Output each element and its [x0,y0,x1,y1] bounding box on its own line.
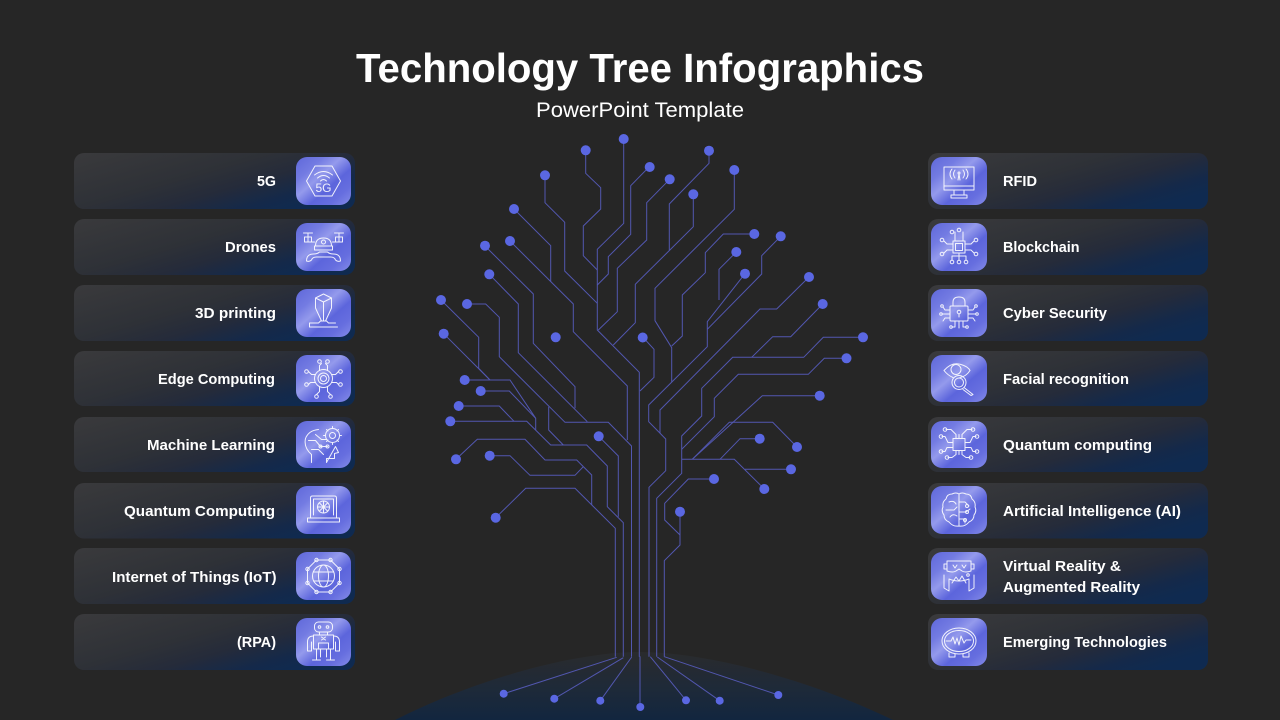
left item: 5G [74,153,355,209]
label: 3D printing [195,305,276,322]
label: Emerging Technologies [1003,634,1167,651]
left item: RPA [74,614,355,670]
icon: brain [942,493,976,526]
label: Blockchain [1003,239,1080,256]
ground mound [395,652,893,720]
right item: RFID [928,153,1208,209]
label: Drones [225,239,276,256]
right item: Cyber Security [928,285,1208,341]
icon: 5G hexagon: 5G [315,181,332,195]
label: Quantum computing [1003,437,1152,454]
label: RFID [1003,173,1037,190]
subtitle: PowerPoint Template [536,99,744,122]
icon: IoT globe [306,558,341,594]
label: Edge Computing [158,371,275,388]
left item: Drones [74,219,355,275]
icon: head with gear [305,426,342,462]
icon: laptop [308,496,340,522]
icon: robot [308,622,340,660]
labels: Virtual Reality & [1003,558,1121,575]
icon: pulse monitor [942,628,976,657]
labels: Augmented Reality [1003,579,1141,596]
left item: 3D printing [74,285,355,341]
tree branches and trunk [441,139,863,707]
left item: Machine Learning [74,417,355,472]
left item: Edge Computing [74,351,355,406]
icon: 3D printer crystal [310,294,338,327]
icon: quantum chip [939,428,979,459]
icon: edge computing [305,360,342,398]
label: Quantum Computing [124,503,275,520]
right item: Quantum computing [928,417,1208,472]
label: Facial recognition [1003,371,1129,388]
label: Artificial Intelligence (AI) [1003,503,1181,520]
circuit tree [436,134,868,711]
title: Technology Tree Infographics [356,45,924,91]
left item: Internet of Things (IoT) [74,548,355,604]
icon: VR headset [944,561,974,591]
label: Internet of Things (IoT) [112,569,277,586]
icon: drone [304,233,344,261]
right item: Emerging Technologies [928,614,1208,670]
icon: lock with circuits [940,297,978,328]
right item: Artificial Intelligence (AI) [928,483,1208,538]
icon: eye and magnifier [944,364,973,396]
icon: 5G hexagon [306,166,340,196]
right item: Virtual and Augmented Reality [928,548,1208,604]
tree node dots [436,134,868,711]
icon: RFID monitor [944,167,974,198]
right item: Facial recognition [928,351,1208,406]
label: Machine Learning [147,437,275,454]
icon: chip network [940,228,978,264]
labels [1003,558,1141,596]
label: (RPA) [237,634,276,651]
right item: Blockchain [928,219,1208,275]
label: Cyber Security [1003,305,1108,322]
label: 5G [257,173,276,190]
left item: Quantum Computing [74,483,355,538]
